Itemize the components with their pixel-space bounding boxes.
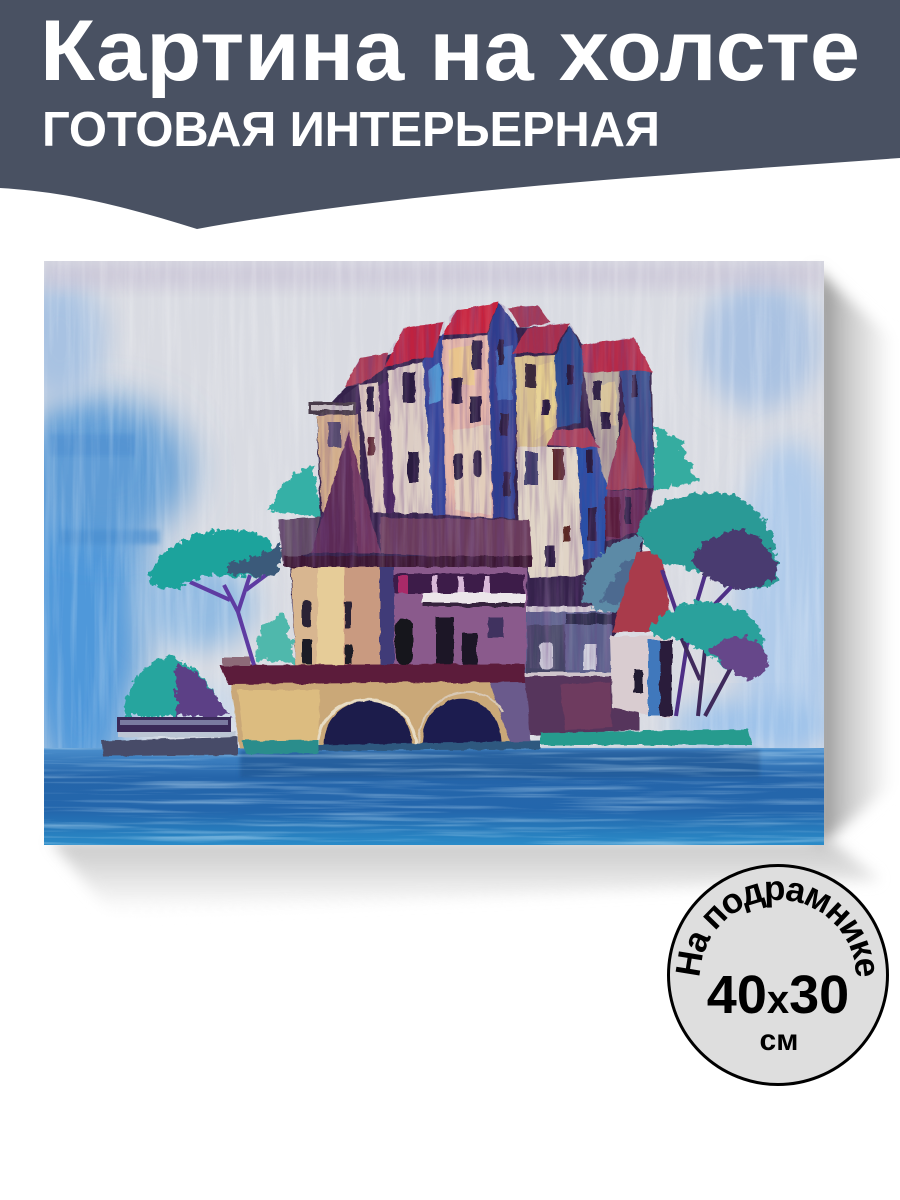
tower windows <box>328 340 637 567</box>
foliage behind small house <box>580 535 642 612</box>
badge size: 40x30 <box>707 965 849 1025</box>
water <box>44 748 824 845</box>
stone terrace with arches <box>219 657 640 748</box>
small red-roof house <box>610 550 672 718</box>
subtitle: ГОТОВАЯ ИНТЕРЬЕРНАЯ <box>42 103 660 157</box>
left umbrella pine <box>150 530 281 665</box>
sky brush texture <box>44 261 824 751</box>
header banner <box>0 0 900 229</box>
upper towers <box>308 302 654 578</box>
left low bush with railing <box>117 656 231 732</box>
size badge <box>667 864 889 1086</box>
lower palace <box>291 560 527 668</box>
back teal foliage <box>256 425 697 664</box>
sky background <box>44 261 824 748</box>
right upper pine <box>638 493 778 716</box>
right lower block <box>520 606 614 672</box>
castle dark underlay <box>278 304 654 672</box>
badge curved label: На подрамнике <box>676 881 874 976</box>
castle and terrace <box>101 302 752 756</box>
brush strokes over castle <box>278 302 654 672</box>
island base <box>101 729 752 756</box>
canvas drop shadow <box>50 268 892 912</box>
painting: island castle on water <box>15 261 845 845</box>
roof band and conical tower <box>278 430 532 567</box>
badge unit: см <box>760 1024 798 1057</box>
title: Картина на холсте <box>40 3 860 99</box>
right lower pine <box>650 602 768 716</box>
